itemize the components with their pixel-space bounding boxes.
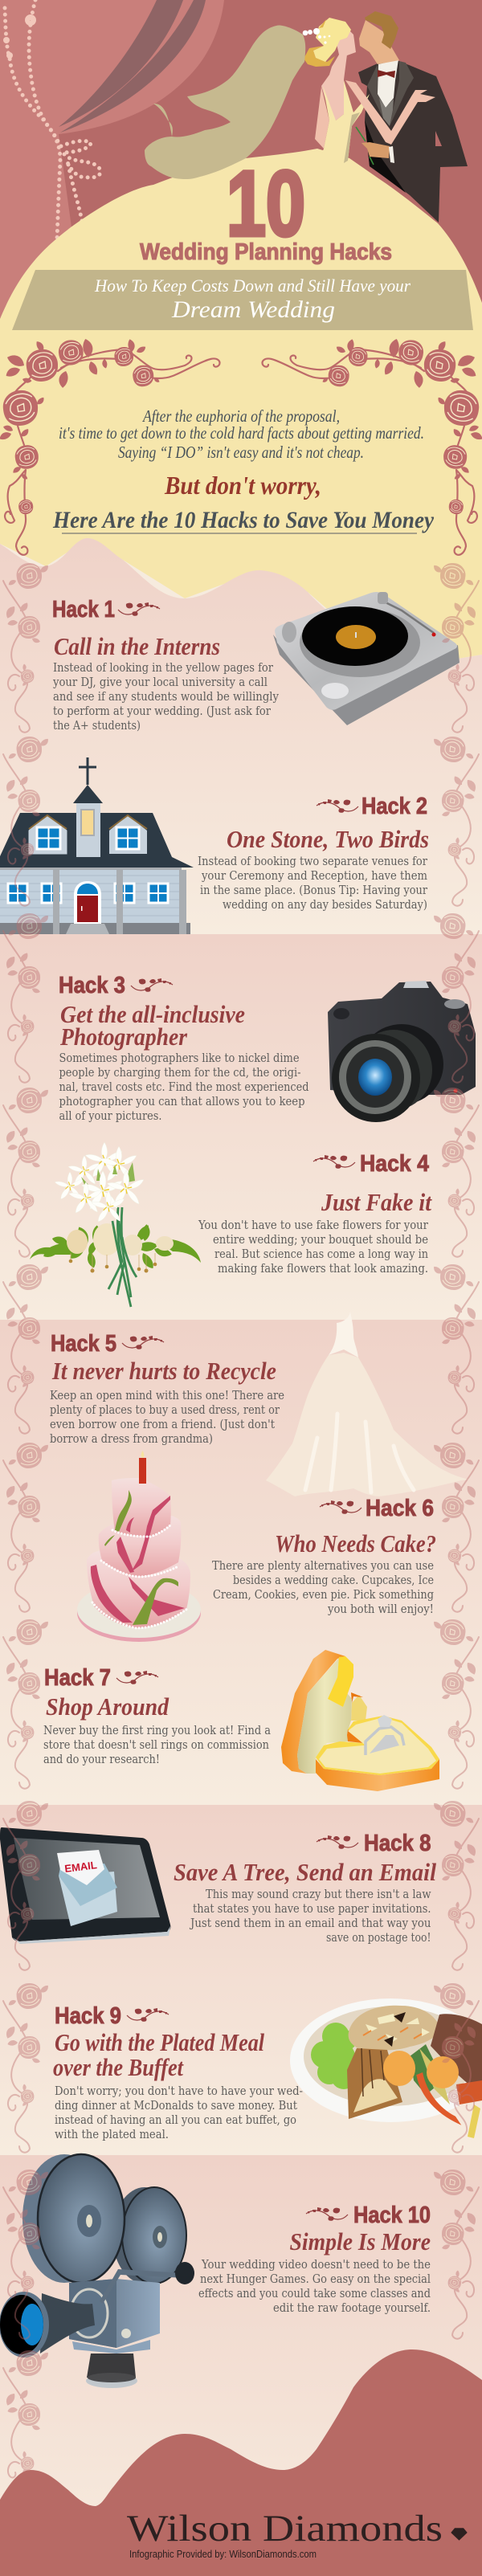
body text: Just send them in an email and that way you [189, 1917, 431, 1930]
body text: that states you have to use paper invitations. [193, 1903, 431, 1916]
body text: next Hunger Games. Go easy on the special [200, 2273, 431, 2286]
panel: hack 5, 6 and 7 background [0, 1320, 482, 1805]
body text [55, 2085, 303, 2141]
subtitle banner: Dream Wedding [171, 296, 335, 323]
body text: and see if any students would be willingly [53, 691, 280, 704]
heading: Hack 9 [55, 2003, 121, 2029]
hack 1 [52, 592, 460, 733]
subheading [59, 1000, 245, 1051]
hack 5 [50, 1312, 470, 1496]
body text: Your wedding video doesn't need to be the [201, 2259, 431, 2272]
heading: Hack 3 [59, 973, 125, 998]
body text: Sometimes photographers like to nickel dime [59, 1052, 300, 1065]
footer wave [0, 2349, 482, 2576]
heading: Hack 2 [362, 794, 427, 819]
background: rose top panel [0, 0, 482, 345]
body text: your DJ, give your local university a call [52, 676, 268, 689]
subheading: Shop Around [46, 1692, 169, 1721]
body text: people by charging them for the cd, the origi- [59, 1067, 300, 1080]
ornament [317, 1835, 358, 1849]
subheading: Get the all-inclusive [60, 1000, 245, 1028]
veil [145, 26, 305, 179]
illustration: cake [77, 1451, 201, 1642]
body text: instead of having an all you can eat buffet, go [55, 2114, 296, 2127]
illustration: plated meal [290, 1998, 482, 2138]
subheading: Who Needs Cake? [275, 1529, 436, 1557]
footer brand: Wilson Diamonds [127, 2508, 443, 2549]
body text: ding dinner at McDonalds to save money. But [55, 2100, 298, 2113]
credit: Infographic Provided by: WilsonDiamonds.com [129, 2548, 317, 2560]
body text: photographer you can that allows you to keep [59, 1096, 305, 1108]
subheading: Just Fake it [321, 1188, 432, 1216]
subheading: over the Buffet [53, 2053, 184, 2081]
subheading: Go with the Plated Meal [55, 2028, 264, 2056]
hack 6 [77, 1451, 436, 1642]
ornament [127, 2008, 169, 2022]
subheading [53, 2028, 264, 2081]
heading: Hack 7 [44, 1665, 111, 1691]
hack 8 [0, 1827, 436, 1945]
body text: you both will enjoy! [327, 1603, 434, 1616]
title number: 10 [227, 153, 305, 255]
ornament [116, 1671, 158, 1684]
body text [52, 662, 280, 733]
heading: Hack 1 [52, 597, 115, 623]
illustration: church [0, 757, 194, 934]
body text: with the plated meal. [55, 2129, 169, 2141]
subheading: Call in the Interns [54, 632, 220, 660]
ornament [320, 1500, 362, 1514]
subheading: One Stone, Two Birds [227, 825, 429, 853]
heading: Hack 10 [353, 2202, 431, 2228]
title: Wedding Planning Hacks [140, 239, 392, 265]
pearl strings [5, 0, 100, 239]
body text [198, 2259, 431, 2315]
footer brand [127, 2508, 468, 2560]
groom [358, 11, 468, 222]
body text: Instead of booking two separate venues for [198, 855, 428, 868]
body text [198, 855, 428, 912]
heading: Hack 4 [360, 1151, 429, 1177]
icon: camera [328, 981, 476, 1122]
icon: tablet [0, 1827, 170, 1944]
body text: edit the raw footage yourself. [273, 2302, 431, 2315]
pearl hair pin [303, 28, 330, 44]
panel: hack 8 and 9 background [0, 1805, 482, 2155]
subtitle banner [12, 270, 473, 330]
body text: Don't worry; you don't have to have your wed- [55, 2085, 303, 2098]
hack 2 [0, 757, 429, 934]
body text [212, 1560, 434, 1616]
ornament [122, 1336, 164, 1349]
illustration: film camera [0, 2154, 194, 2388]
callout: here are the hacks: Here Are the 10 Hacks to Save You Money [52, 507, 435, 533]
body text: Cream, Cookies, even pie. Pick something [213, 1589, 434, 1602]
intro text [59, 406, 424, 462]
subheading: Photographer [59, 1023, 188, 1051]
ornament [131, 978, 173, 992]
body text: the A+ students) [53, 720, 141, 733]
subheading: Simple Is More [289, 2227, 431, 2256]
body text: and do your research! [43, 1753, 160, 1766]
hack 4 [30, 1142, 432, 1307]
body text: This may sound crazy but there isn't a law [206, 1888, 431, 1901]
panel: hack 1 and 2 background [0, 538, 482, 934]
body text: Keep an open mind with this one! There are [50, 1390, 284, 1402]
body text: besides a wedding cake. Cupcakes, Ice [233, 1574, 434, 1587]
body text: borrow a dress from grandma) [50, 1433, 213, 1446]
body text: even borrow one from a friend. (Just don't [50, 1419, 276, 1431]
body text: real. But science has come a long way in [214, 1248, 429, 1261]
dress: cream skirt [0, 149, 482, 659]
body text: wedding on any day besides Saturday) [223, 899, 427, 912]
body text: Instead of looking in the yellow pages for [53, 662, 274, 675]
illustration: bouquet [30, 1142, 201, 1307]
icon: ring box [281, 1650, 439, 1791]
ornament [313, 1155, 355, 1169]
body text: nal, travel costs etc. Find the most experienced [59, 1081, 308, 1094]
side vine borders [3, 563, 479, 2520]
panel: hack 10 background [0, 2155, 482, 2576]
ornament [317, 799, 358, 813]
curtain [0, 0, 224, 329]
body text: Never buy the first ring you look at! Find a [43, 1725, 271, 1737]
subheading: It never hurts to Recycle [51, 1357, 276, 1385]
body text: your Ceremony and Reception, have them [201, 870, 428, 883]
body text: making fake flowers that look amazing. [218, 1263, 428, 1276]
body text: store that doesn't sell rings on commission [43, 1739, 270, 1752]
body text: There are plenty alternatives you can use [212, 1560, 434, 1573]
body text: to perform at your wedding. (Just ask for [53, 705, 272, 718]
bride [304, 18, 435, 165]
body text: in the same place. (Bonus Tip: Having your [200, 884, 428, 897]
body text [43, 1725, 271, 1766]
body text [198, 1219, 429, 1276]
body text: save on postage too! [326, 1932, 431, 1945]
icon: tablet: EMAIL [64, 1859, 98, 1875]
ornament [306, 2207, 348, 2221]
heading: Hack 8 [364, 1831, 431, 1856]
heading: Hack 6 [366, 1496, 434, 1521]
heading: Hack 5 [51, 1331, 116, 1357]
intro text: After the euphoria of the proposal, [141, 406, 340, 426]
hack 10 [0, 2154, 431, 2388]
icon: diamond [451, 2528, 468, 2541]
hack 7 [43, 1650, 439, 1791]
body text: entire wedding; your bouquet should be [213, 1234, 428, 1247]
callout: but don't worry: But don't worry, [164, 471, 321, 500]
subtitle banner: How To Keep Costs Down and Still Have your [94, 276, 411, 296]
body text: effects and you could take some classes and [198, 2288, 431, 2300]
icon: turntable [273, 592, 460, 725]
floral garlands [0, 339, 482, 555]
subheading: Save A Tree, Send an Email [174, 1858, 436, 1886]
body text [50, 1390, 284, 1446]
ornament [118, 602, 160, 616]
body text [59, 1052, 308, 1123]
hack 9 [53, 1998, 482, 2141]
hack 3 [59, 973, 476, 1123]
panel: hack 3 and 4 background [0, 934, 482, 1320]
body text: plenty of places to buy a used dress, rent or [50, 1404, 280, 1417]
intro text: Saying “I DO” isn't easy and it's not cheap. [118, 443, 364, 462]
body text: You don't have to use fake flowers for your [198, 1219, 429, 1232]
illustration: wedding dress [266, 1312, 470, 1496]
body text [189, 1888, 431, 1945]
body text: all of your pictures. [59, 1110, 162, 1123]
